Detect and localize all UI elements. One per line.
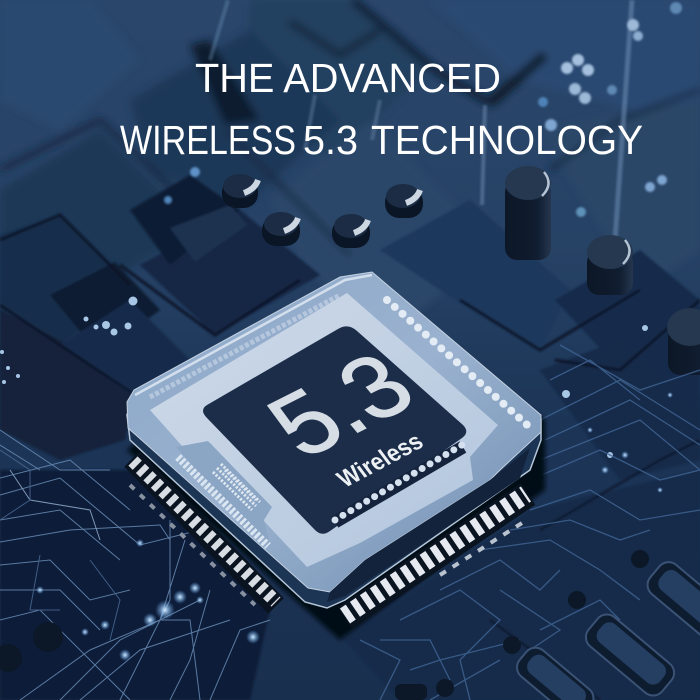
blurred glowing dots and light streaks, upper right (164, 0, 682, 240)
chip light inner panel (150, 293, 498, 567)
glass corrugated band (150, 295, 340, 397)
cylindrical components on board (222, 166, 700, 375)
side component strip (178, 457, 268, 546)
blurred upper board tiles (0, 0, 700, 340)
title line 2: 5.3 (303, 117, 358, 163)
chip right pins (345, 494, 528, 618)
icon: capsule pad 2 (643, 557, 700, 646)
icon: small capacitor 3 (332, 214, 370, 248)
glass lower rim (127, 415, 541, 608)
chip label: Wireless: Wireless (332, 428, 429, 493)
side component pad grid (213, 464, 260, 510)
title line 2: WIRELESS (120, 117, 296, 163)
icon: small capacitor 2 (262, 212, 300, 246)
icon: small capacitor 4 (385, 184, 423, 218)
glass top-edge highlight (135, 275, 372, 395)
icon: tall capacitor 3 (667, 308, 700, 375)
central dark chip (203, 326, 466, 534)
glowing trace nodes, lower left (36, 392, 673, 661)
chip glass body (127, 272, 541, 608)
side component shell (176, 441, 272, 545)
chip label: 5.3: 5.3 (248, 334, 434, 476)
icon: small capacitor 1 (222, 174, 258, 208)
dark mid and lower board tiles (0, 175, 700, 700)
icon: tall capacitor 2 (587, 235, 633, 295)
icon: capsule pad 1 (581, 610, 679, 700)
chip bottom pad row (335, 445, 463, 522)
side component on chip (176, 441, 272, 546)
chip shadow (127, 280, 545, 640)
title (120, 55, 643, 163)
circuit traces, lower left (0, 430, 270, 700)
icon: capsule pad 3 (512, 643, 598, 700)
dark bottom lip (327, 448, 530, 602)
dots along right glass edge (387, 300, 534, 431)
circuit traces, lower right (360, 345, 700, 700)
upper-left glowing pads (0, 296, 648, 458)
title line 1: THE ADVANCED (195, 55, 501, 101)
icon: small parts (0, 550, 649, 700)
title line 2: TECHNOLOGY (371, 117, 643, 163)
chip left pins (130, 459, 276, 606)
icon: tall capacitor 1 (505, 166, 551, 260)
lower-right dark pads (0, 550, 700, 700)
glass top (127, 272, 541, 592)
